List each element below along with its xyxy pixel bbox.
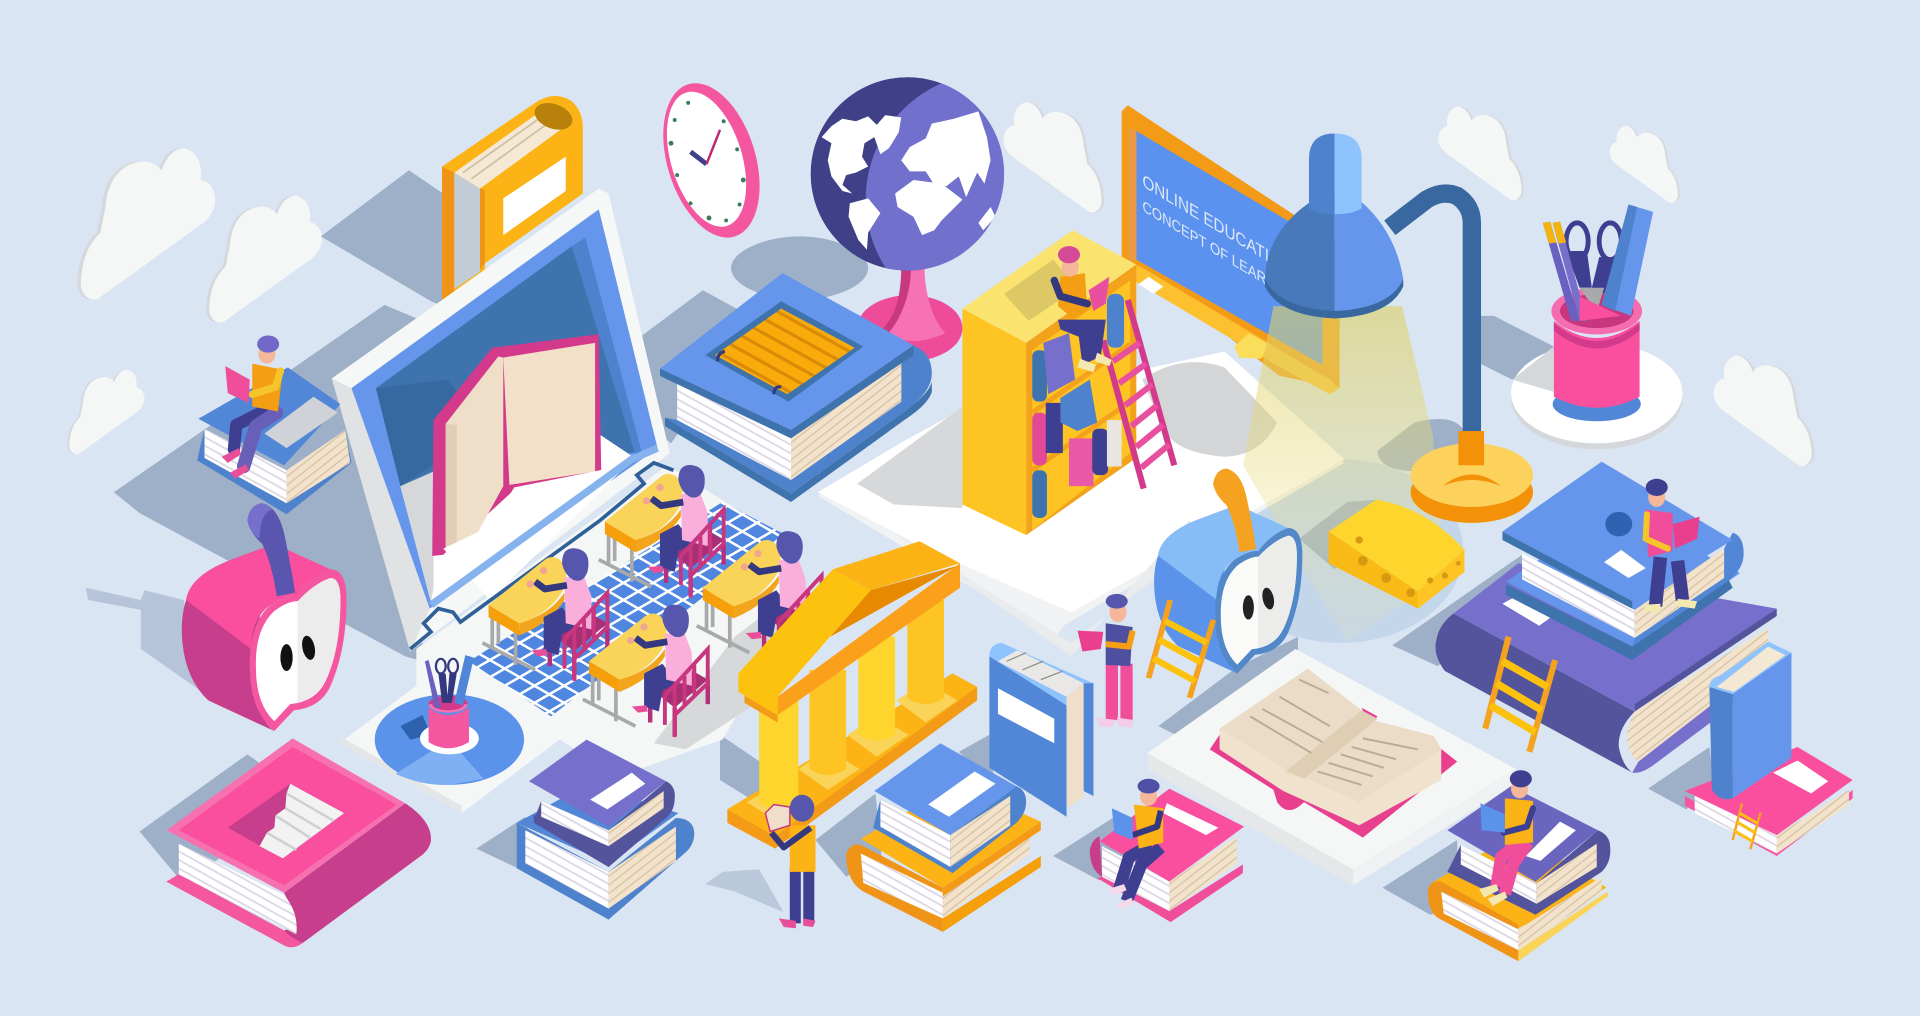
columns — [759, 600, 944, 809]
ladder on purple book — [1485, 637, 1555, 752]
shelf books — [1032, 294, 1124, 518]
roof — [744, 696, 778, 722]
cheese holes — [1356, 536, 1461, 597]
chalk tray — [1131, 265, 1340, 394]
person on pink book — [1108, 779, 1163, 909]
stack purple over blue — [517, 740, 694, 920]
laptop hinge outline — [410, 463, 673, 649]
stack bottom right — [1428, 786, 1610, 961]
pen cup on plate — [1511, 204, 1682, 449]
desk with student — [583, 605, 708, 737]
person standing with book by pillars — [765, 795, 816, 928]
classical pillars building — [727, 541, 977, 849]
laptop screen — [332, 189, 670, 651]
pink book with person — [1090, 779, 1244, 922]
globe — [810, 77, 1004, 360]
person reading on book left — [222, 336, 283, 479]
pink book right — [1685, 747, 1853, 856]
person on bookshelf — [1054, 246, 1112, 372]
small ladder — [1733, 803, 1761, 849]
continents — [822, 111, 996, 250]
board text: CONCEPT OF LEARNING — [1142, 198, 1299, 309]
ruler — [1602, 204, 1653, 316]
person reading on blue book — [1643, 479, 1700, 612]
person ground shadow — [705, 869, 784, 912]
clock — [646, 71, 777, 249]
desk lamp — [1265, 133, 1533, 523]
slatted window — [715, 309, 855, 394]
apple stem — [247, 503, 295, 596]
globe stand — [857, 267, 962, 361]
open book on white platform — [1147, 649, 1516, 885]
laptop base — [339, 465, 784, 813]
desk with student — [482, 548, 607, 681]
standing yellow book behind laptop — [442, 96, 583, 300]
laptop — [332, 189, 822, 813]
big blue book with window — [660, 273, 932, 502]
keyboard — [469, 502, 784, 716]
book pages — [1220, 669, 1441, 825]
clock hands — [691, 152, 707, 164]
scissors — [1566, 223, 1621, 312]
apple blue — [1154, 469, 1302, 673]
open book in screen — [432, 334, 632, 600]
standing blue book right — [1709, 642, 1791, 799]
column plinths — [747, 682, 958, 818]
cup back rim — [1551, 288, 1642, 334]
globe sphere — [810, 77, 1004, 271]
apple pink — [182, 503, 347, 731]
stairs — [260, 784, 344, 858]
chalkboard — [1122, 105, 1340, 394]
stack blue over yellow — [846, 743, 1041, 932]
pink ladder — [1103, 300, 1174, 489]
laptop hinge band — [431, 448, 658, 605]
lamp base — [1411, 431, 1533, 523]
CD with pen cup — [375, 655, 524, 785]
clouds — [67, 102, 1814, 466]
ground shadows — [114, 170, 1714, 915]
big purple book — [1435, 563, 1777, 773]
clock ticks — [669, 101, 746, 222]
lamp light cone — [1243, 306, 1445, 643]
desk with student — [697, 531, 822, 664]
lamp shade — [1265, 133, 1403, 318]
book label — [503, 157, 566, 235]
lamp ground glow — [1218, 459, 1463, 643]
pink book with stairs — [167, 738, 431, 947]
blue book on purple — [1502, 462, 1744, 660]
apple seeds — [280, 635, 317, 671]
bookshelf — [962, 230, 1136, 535]
small cheese — [1234, 333, 1269, 359]
cup front — [1551, 296, 1642, 421]
white stepped platform — [818, 351, 1344, 656]
desk with student — [599, 465, 724, 598]
board text: ONLINE EDUCATION — [1142, 170, 1292, 280]
person reading on stack — [1479, 770, 1533, 906]
book cover — [1210, 735, 1457, 838]
standing blue book centre — [989, 643, 1093, 817]
person standing reading — [1078, 594, 1134, 727]
small pen cup — [425, 655, 474, 748]
small blue book left — [197, 367, 351, 514]
cheese — [1329, 500, 1464, 609]
yellow ladder by apple — [1149, 600, 1213, 698]
apple stem — [1213, 469, 1256, 552]
apple shadow — [86, 588, 202, 692]
lamp arm — [1390, 194, 1472, 438]
pencils — [1543, 222, 1587, 321]
